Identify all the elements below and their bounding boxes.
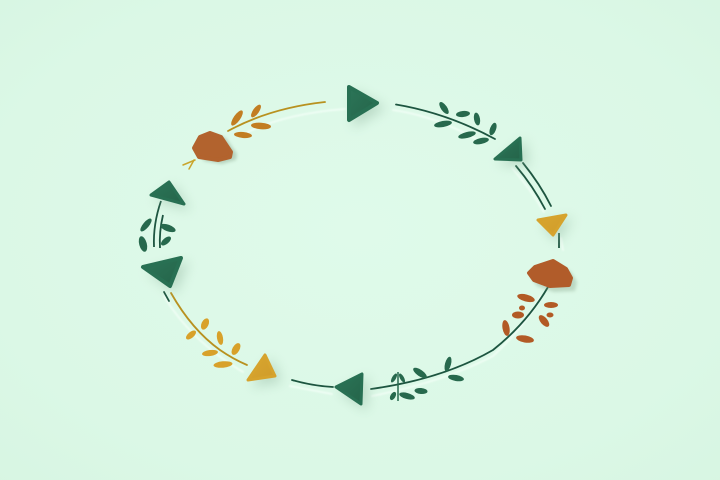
- arc: bottom short line: [292, 380, 333, 387]
- triangle: lower left yellow: [248, 355, 282, 387]
- arc: short right line: [558, 233, 560, 248]
- icon: soil mound right: [529, 261, 577, 292]
- arc: left inner line: [160, 215, 163, 248]
- triangle: right yellow: [538, 215, 573, 242]
- icon: gold chevron arrow: [183, 160, 195, 169]
- arc: right outer double line: [523, 163, 551, 206]
- icon: green plant and leaves bottom: [389, 356, 464, 401]
- arc: bottom right long line: [371, 287, 548, 389]
- icon: green leaves left: [137, 217, 177, 253]
- icon: gold grain leaves top left: [229, 103, 271, 139]
- arc: right inner double line: [516, 166, 545, 209]
- icon: gold leaves lower left: [184, 317, 242, 369]
- arc: top right branch: [396, 104, 495, 139]
- triangle: top right: [495, 138, 529, 166]
- triangle: left lower: [143, 258, 189, 293]
- triangle: top: [349, 87, 386, 128]
- icon: green leaves top right: [434, 101, 498, 146]
- arc: lower left gold line: [171, 293, 247, 365]
- triangle: left upper: [151, 182, 191, 211]
- arc: lower left short dark line: [164, 292, 169, 301]
- soft white line reflections: [164, 109, 563, 396]
- arc: left outer line: [154, 201, 161, 247]
- triangle: bottom: [336, 374, 368, 411]
- icon: soil mound upper left: [194, 133, 237, 164]
- arc: top left gold line: [228, 102, 325, 131]
- icon: orange leaves lower right: [501, 292, 558, 344]
